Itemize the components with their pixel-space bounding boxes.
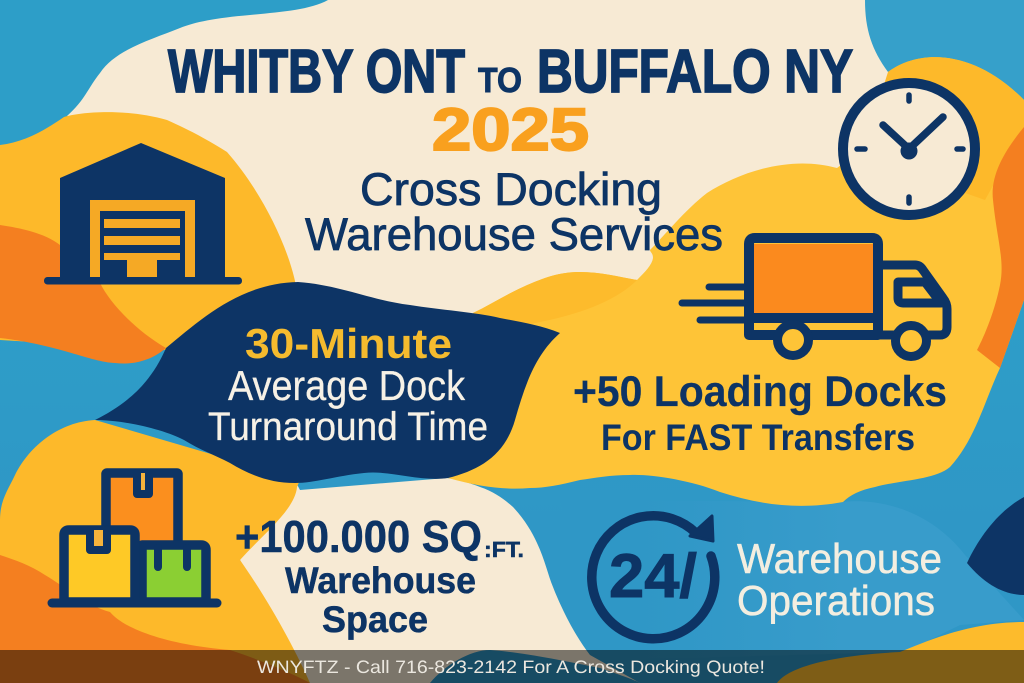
subtitle: Cross Docking [360,163,662,215]
callout: warehouse operations [737,535,942,624]
callout: warehouse space: +100.000 SQ [235,511,482,562]
icon: 24/7 circular arrow: 24/ [609,542,697,611]
title [168,37,853,105]
icon: delivery truck [682,238,947,356]
callout: loading docks [573,368,947,458]
title: BUFFALO NY [537,37,853,105]
year: 2025 [432,96,589,163]
callout: warehouse space: :FT. [484,537,524,562]
callout: loading docks: For FAST Transfers [601,417,915,458]
callout: warehouse operations: Operations [737,577,935,624]
callout: warehouse space [235,511,524,640]
callout: 30-minute turnaround: Turnaround Time [208,405,488,449]
callout: loading docks: +50 Loading Docks [573,368,947,416]
icon: warehouse [44,143,242,284]
callout: warehouse space: Space [322,599,428,640]
callout: warehouse space: Warehouse [285,560,476,601]
callout: 30-minute turnaround: 30-Minute [245,320,452,367]
callout: warehouse operations: Warehouse [737,535,942,582]
icon: 24/7 circular arrow [592,516,715,639]
footer band: WNYFTZ - Call 716-823-2142 For A Cross Docking Quote! [257,657,765,677]
footer band [0,650,1024,683]
subtitle: Warehouse Services [305,208,723,260]
title: TO [478,61,522,100]
title: WHITBY ONT [168,37,465,105]
callout: 30-minute turnaround: Average Dock [228,362,466,409]
callout: 30-minute turnaround [208,320,488,449]
icon: stacked boxes [52,473,217,603]
icon: clock [843,83,975,215]
subtitle [305,163,723,260]
panel: dock turnaround navy blob [95,282,560,483]
